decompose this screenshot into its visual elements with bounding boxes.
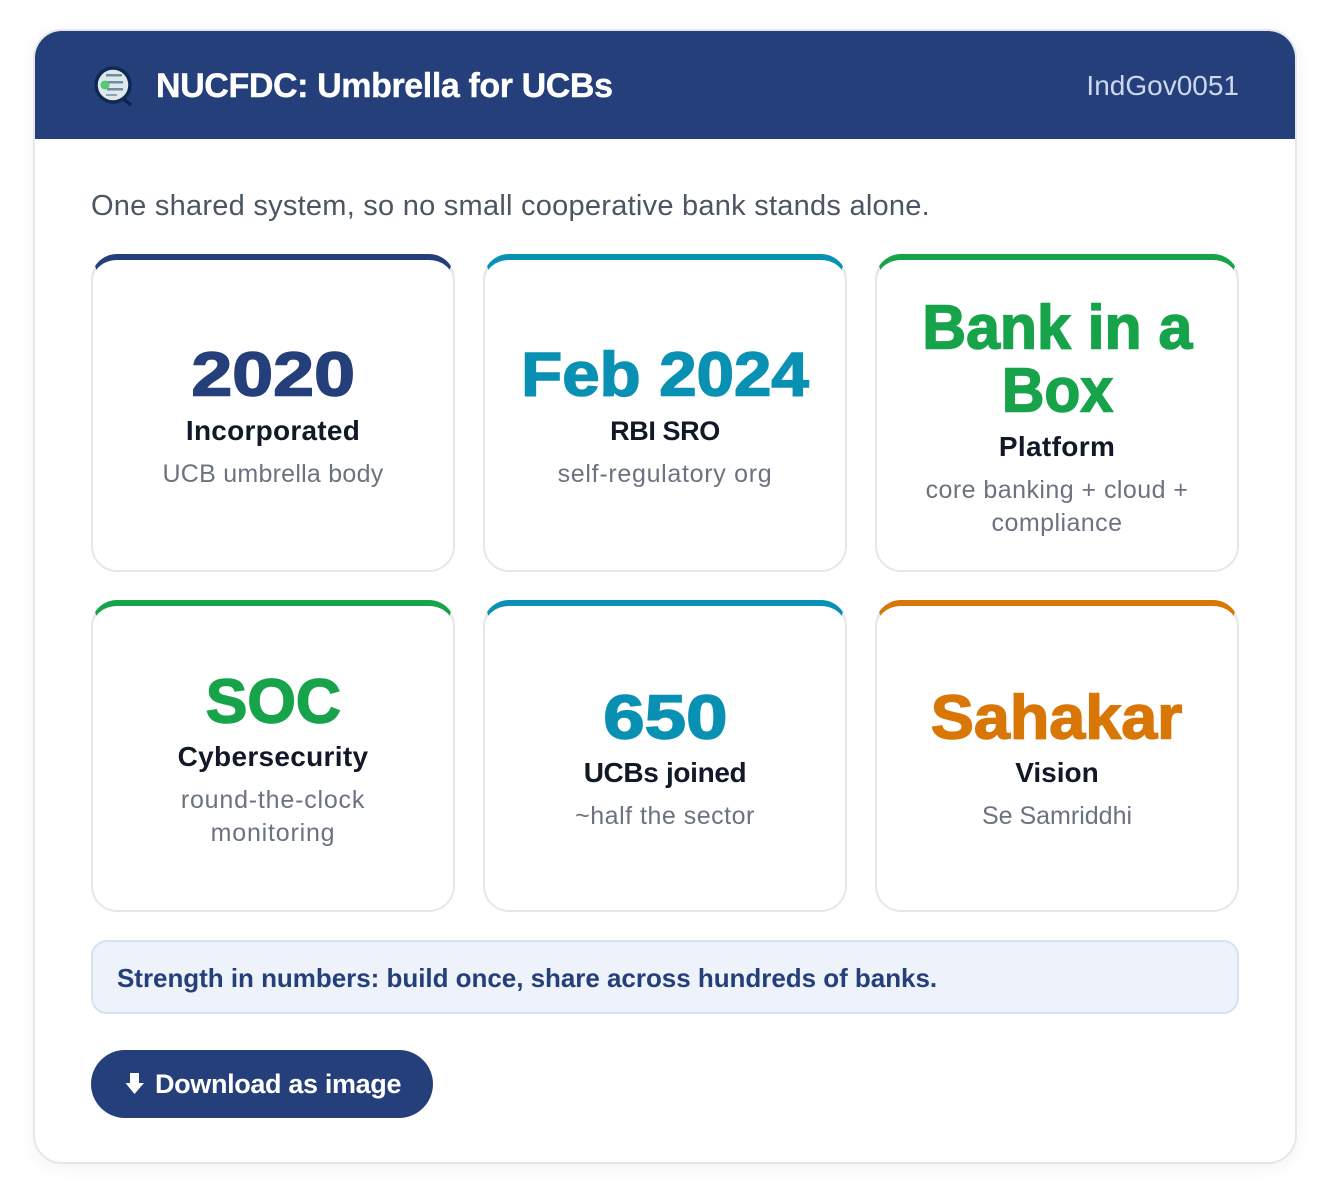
value second line: Box bbox=[1001, 355, 1113, 425]
panel: Feb 2024 bbox=[483, 254, 847, 572]
value: Feb 2024 bbox=[521, 339, 809, 409]
description: compliance bbox=[992, 509, 1122, 537]
label: RBI SRO bbox=[610, 416, 720, 446]
description bbox=[181, 786, 365, 847]
description: Se Samriddhi bbox=[982, 802, 1132, 830]
label: Incorporated bbox=[186, 415, 360, 446]
value: Bank in a bbox=[922, 292, 1192, 362]
description: monitoring bbox=[211, 819, 335, 847]
panel: 2020 bbox=[91, 254, 455, 572]
title: NUCFDC: Umbrella for UCBs bbox=[156, 67, 613, 105]
description: round-the-clock bbox=[181, 786, 365, 814]
panel: SOC bbox=[91, 600, 455, 912]
label: Vision bbox=[1015, 757, 1099, 788]
label: Cybersecurity bbox=[178, 741, 368, 772]
value: 2020 bbox=[191, 339, 355, 409]
document id: IndGov0051 bbox=[1086, 70, 1239, 101]
callout text: Strength in numbers: build once, share across hundreds of banks. bbox=[117, 963, 937, 993]
panel: Bank in a Box bbox=[875, 254, 1239, 572]
description: self-regulatory org bbox=[558, 460, 772, 488]
label: Platform bbox=[999, 431, 1115, 462]
description: ~half the sector bbox=[575, 802, 755, 830]
description: UCB umbrella body bbox=[162, 460, 384, 488]
callout bbox=[91, 940, 1239, 1014]
header bar bbox=[35, 31, 1295, 139]
subtitle: One shared system, so no small cooperative bank stands alone. bbox=[91, 190, 930, 222]
download button bbox=[91, 1050, 433, 1118]
icon: logo with magnifier and list bbox=[94, 66, 132, 106]
button label: Download as image bbox=[155, 1069, 401, 1099]
value: 650 bbox=[603, 682, 727, 752]
panel: 650 bbox=[483, 600, 847, 912]
label: UCBs joined bbox=[584, 757, 746, 788]
icon: down arrow bbox=[126, 1073, 144, 1094]
panel: Sahakar bbox=[875, 600, 1239, 912]
description bbox=[926, 476, 1188, 537]
value: Sahakar bbox=[931, 682, 1183, 752]
description: core banking + cloud + bbox=[926, 476, 1188, 504]
value: SOC bbox=[205, 666, 341, 736]
